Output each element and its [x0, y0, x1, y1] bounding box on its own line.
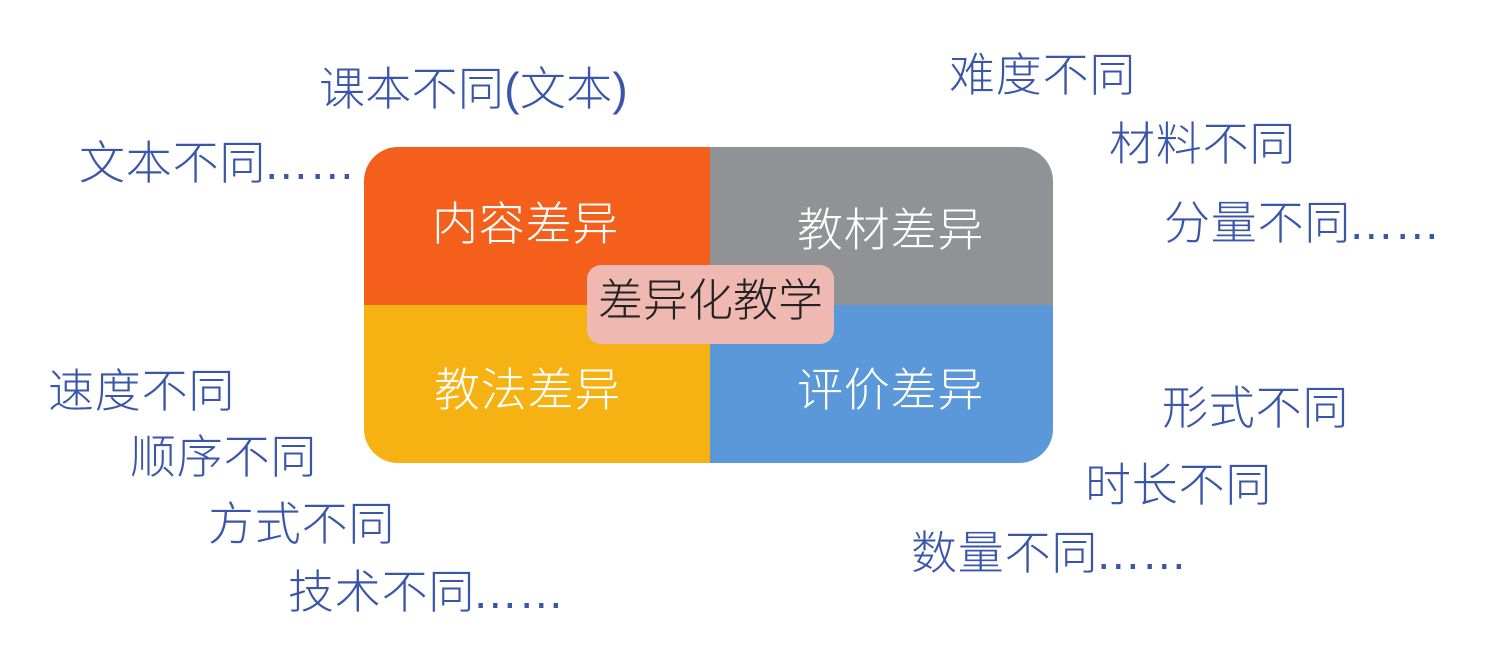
heading: method difference: 教法差异 [434, 364, 621, 416]
text: material differs: 材料不同 [1109, 118, 1296, 170]
center label: differentiated teaching [587, 265, 834, 344]
center label: differentiated teaching: 差异化教学 [598, 275, 823, 326]
heading: materials difference: 教材差异 [797, 204, 984, 256]
text: manner differs: 方式不同 [208, 498, 395, 550]
text: order differs: 顺序不同 [130, 431, 317, 483]
text: quantity differs: 数量不同…… [911, 527, 1187, 579]
heading: assessment difference: 评价差异 [797, 364, 984, 416]
text: textbook differs: 课本不同(文本) [319, 63, 628, 115]
text: text differs: 文本不同…… [79, 137, 355, 189]
heading: content difference: 内容差异 [432, 198, 619, 250]
quadrant: content [364, 147, 710, 305]
text: technology differs: 技术不同…… [288, 566, 564, 618]
text: difficulty differs: 难度不同 [949, 49, 1136, 101]
text: speed differs: 速度不同 [48, 365, 235, 417]
text: amount differs: 分量不同…… [1164, 197, 1440, 249]
text: form differs: 形式不同 [1162, 382, 1349, 434]
quadrant: method [364, 305, 710, 463]
text: duration differs: 时长不同 [1085, 459, 1272, 511]
quadrant: assessment [710, 305, 1053, 463]
quadrant: materials [710, 147, 1053, 305]
panel: central quadrant matrix [364, 147, 1053, 463]
